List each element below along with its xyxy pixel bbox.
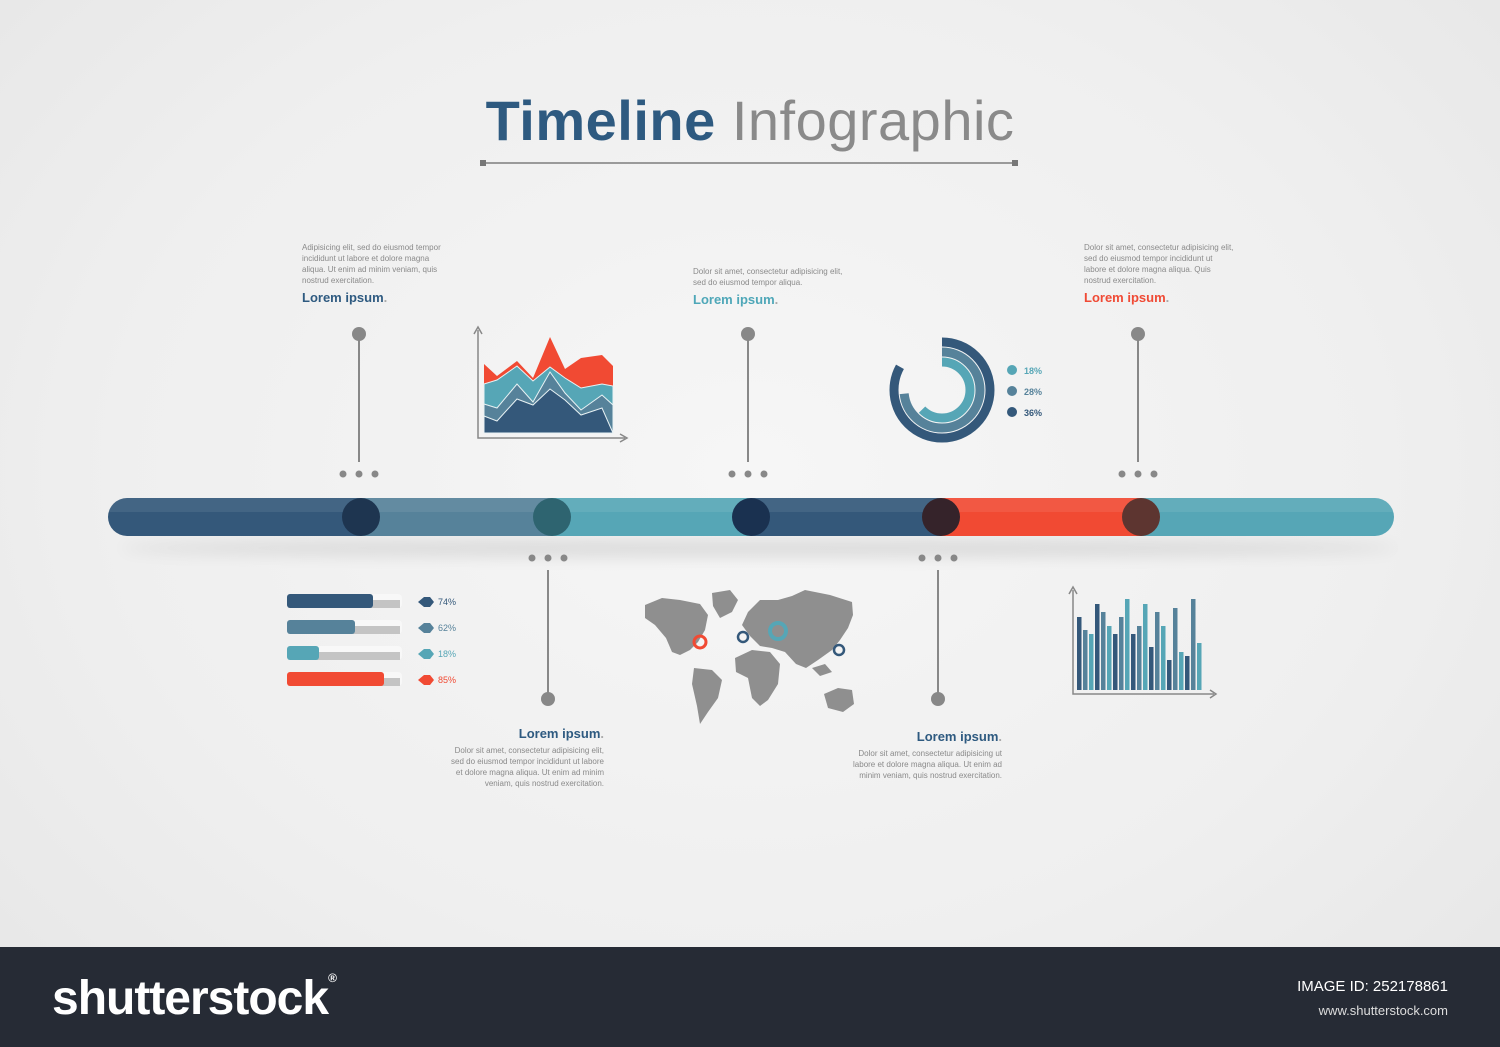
column chart: [1069, 587, 1216, 698]
text block: bottom-left: [451, 726, 604, 788]
shadow under timeline: [120, 539, 1400, 557]
progress bars: 62%: [438, 623, 456, 633]
text block: top-left: [302, 243, 441, 305]
timeline bar: [108, 498, 1394, 536]
ring legend: [1007, 365, 1042, 418]
progress bars: [287, 594, 456, 686]
world map: [645, 590, 854, 724]
progress bars: 74%: [438, 597, 456, 607]
text block: bottom-left: Dolor sit amet, consectetur adipisicing elit, sed do eiusmod tempor incididunt ut labore et dolore magna aliqua. Ut enim ad minim veniam, quis nostrud exercitation.: [451, 746, 604, 788]
ring legend: 28%: [1024, 387, 1042, 397]
timeline graphics: [108, 326, 1394, 724]
ring legend: 18%: [1024, 366, 1042, 376]
text block: bottom-right: [853, 729, 1002, 780]
progress bars: 85%: [438, 675, 456, 685]
connector stems: [340, 327, 1158, 706]
footer image id: IMAGE ID: 252178861: [1297, 978, 1448, 995]
text block: bottom-left: Lorem ipsum.: [519, 726, 604, 741]
text block: top-center: [693, 267, 842, 307]
text block: top-right: Lorem ipsum.: [1084, 290, 1169, 305]
footer image id: [1297, 978, 1448, 1018]
timeline nodes: [342, 498, 1160, 536]
footer image id: www.shutterstock.com: [1319, 1003, 1448, 1018]
text block: bottom-right: Lorem ipsum.: [917, 729, 1002, 744]
text block: top-center: Dolor sit amet, consectetur adipisicing elit, sed do eiusmod tempor aliqua.: [693, 267, 842, 287]
footer logo: shutterstock®: [52, 971, 336, 1025]
ring legend: 36%: [1024, 408, 1042, 418]
text block: top-left: Lorem ipsum.: [302, 290, 387, 305]
text block: top-center: Lorem ipsum.: [693, 292, 778, 307]
text block: top-right: [1084, 243, 1233, 305]
title: Timeline Infographic: [486, 89, 1014, 152]
footer bar: [0, 947, 1500, 1047]
text block: top-left: Adipisicing elit, sed do eiusmod tempor incididunt ut labore et dolore magna aliqua. Ut enim ad minim veniam, quis nostrud exercitation.: [302, 243, 441, 285]
progress bars: 18%: [438, 649, 456, 659]
text block: bottom-right: Dolor sit amet, consectetur adipisicing ut labore et dolore magna aliqua. Ut enim ad minim veniam, quis nostrud exercitation.: [853, 749, 1002, 780]
area chart: [474, 327, 627, 442]
ring chart: [894, 342, 990, 438]
map markers: [694, 623, 844, 655]
text block: top-right: Dolor sit amet, consectetur adipisicing elit, sed do eiusmod tempor incididunt ut labore et dolore magna aliqua. Quis nostrud exercitation.: [1084, 243, 1233, 285]
